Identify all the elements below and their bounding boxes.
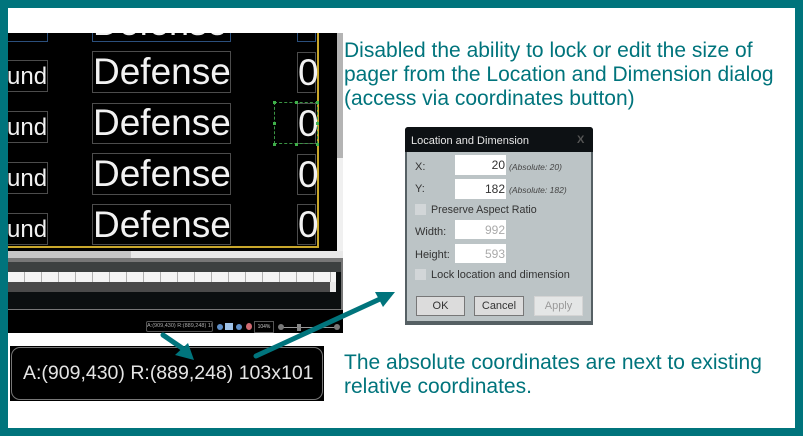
status bar coordinates <box>146 321 213 332</box>
note: disabled locking: Disabled the ability to lock or edit the size of <box>344 39 753 62</box>
dialog title bar <box>405 127 593 152</box>
dialog: Location and Dimension: Cancel <box>482 300 516 312</box>
dialog: Location and Dimension: Width: <box>415 226 446 238</box>
screenshot: application canvas: Defense <box>93 204 231 245</box>
note: disabled locking: (access via coordinates button) <box>344 87 635 110</box>
dialog: Location and Dimension: Apply <box>545 300 572 312</box>
screenshot: application canvas: 0 <box>298 154 319 195</box>
selection box <box>274 102 318 144</box>
dialog title bar: X <box>577 134 584 146</box>
dialog: Location and Dimension: 20 <box>492 158 505 172</box>
dialog: Location and Dimension: OK <box>433 300 448 312</box>
zoom level <box>254 321 274 333</box>
dialog: Location and Dimension: Y: <box>415 183 425 195</box>
zoom slider <box>278 324 340 331</box>
timeline panel <box>8 258 343 310</box>
dialog: Location and Dimension: 182 <box>485 182 505 196</box>
dialog: Location and Dimension: Lock location and dimension <box>431 269 570 281</box>
dialog: Location and Dimension <box>405 127 593 325</box>
arrow: coordinates to dialog <box>254 292 395 358</box>
dialog title bar: Location and Dimension <box>411 135 529 147</box>
dialog: Location and Dimension: (Absolute: 20) <box>509 162 562 172</box>
note: disabled locking: pager from the Location and Dimension dialog <box>344 63 774 86</box>
screenshot: application canvas <box>8 33 343 333</box>
screenshot: application canvas: 0 <box>298 103 319 144</box>
screenshot: application canvas: 0 <box>298 52 319 93</box>
arrow: status bar to readout <box>160 332 194 360</box>
dialog: Location and Dimension: 992 <box>485 223 505 237</box>
timeline ruler <box>8 272 336 283</box>
screenshot: application canvas: Defense <box>93 153 231 194</box>
coordinates readout enlarged: A:(909,430) R:(889,248) 103x101 <box>23 362 314 384</box>
coordinates readout enlarged <box>10 346 324 401</box>
page outline <box>6 28 319 248</box>
note: disabled locking <box>344 39 774 110</box>
dialog: Location and Dimension: Preserve Aspect Ratio <box>431 204 537 216</box>
row 2: und <box>8 114 47 141</box>
note: absolute coordinates: relative coordinates. <box>344 375 532 398</box>
horizontal scrollbar <box>8 251 343 258</box>
row 4: und <box>8 216 47 243</box>
dialog: Location and Dimension: 593 <box>485 247 505 261</box>
status icons <box>217 324 223 330</box>
zoom level: 104% <box>258 324 270 330</box>
note: absolute coordinates <box>344 351 762 398</box>
dialog: Location and Dimension: (Absolute: 182) <box>509 185 567 195</box>
screenshot: application canvas: Defense <box>93 102 231 143</box>
dialog: Location and Dimension: X: <box>415 161 425 173</box>
note: absolute coordinates: The absolute coordinates are next to existing <box>344 351 762 374</box>
row 3: und <box>8 165 47 192</box>
row 1: und <box>8 63 47 90</box>
right scrollbar <box>337 33 343 158</box>
screenshot: application canvas: 0 <box>298 204 319 245</box>
dialog: Location and Dimension: Height: <box>415 249 450 261</box>
screenshot: application canvas: Defense <box>93 51 231 92</box>
row 0 <box>6 13 48 42</box>
